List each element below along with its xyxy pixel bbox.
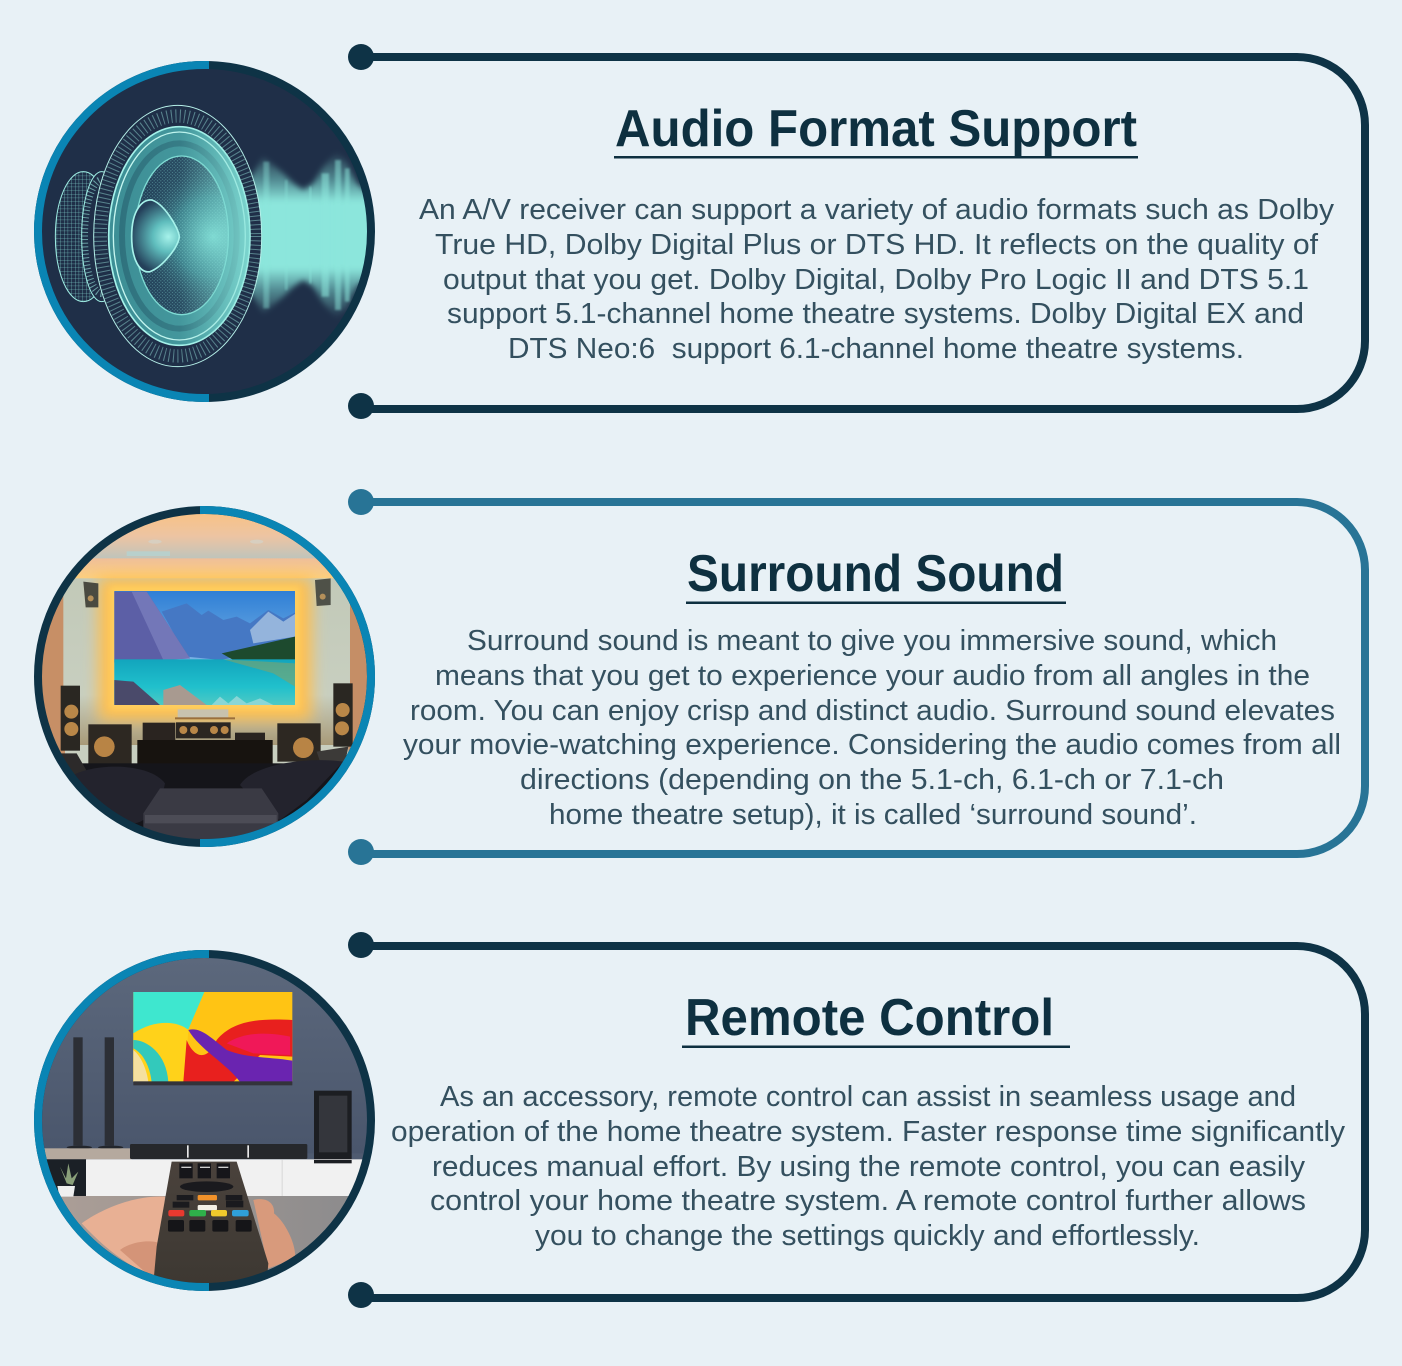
body text: [419, 194, 1335, 365]
panel: Remote Control: [33, 932, 1365, 1308]
image: home theatre room: [33, 507, 380, 850]
body text: directions (depending on the 5.1-ch, 6.1-ch or 7.1-ch: [520, 764, 1224, 796]
body text: room. You can enjoy crisp and distinct audio. Surround sound elevates: [410, 695, 1335, 727]
body text: reduces manual effort. By using the remote control, you can easily: [432, 1151, 1306, 1183]
body text: [391, 1081, 1346, 1252]
heading: Audio Format Support: [615, 100, 1137, 158]
image: hand holding remote facing TV: [33, 947, 380, 1293]
body text: means that you get to experience your audio from all angles in the: [435, 660, 1310, 692]
frame: rounded connector with dots: [348, 44, 1365, 419]
body text: [403, 625, 1341, 831]
body text: DTS Neo:6 support 6.1-channel home theatre systems.: [508, 333, 1244, 365]
frame: rounded connector with dots: [348, 489, 1365, 865]
body text: operation of the home theatre system. Faster response time significantly: [391, 1116, 1346, 1148]
body text: control your home theatre system. A remote control further allows: [430, 1185, 1306, 1217]
heading: Surround Sound: [687, 545, 1064, 603]
frame: rounded connector with dots: [348, 932, 1365, 1308]
body text: True HD, Dolby Digital Plus or DTS HD. It reflects on the quality of: [435, 229, 1319, 261]
body text: Surround sound is meant to give you immersive sound, which: [467, 625, 1277, 657]
panel: Surround Sound: [33, 489, 1365, 865]
body text: you to change the settings quickly and effortlessly.: [535, 1220, 1200, 1252]
body text: support 5.1-channel home theatre systems. Dolby Digital EX and: [447, 298, 1304, 330]
body text: output that you get. Dolby Digital, Dolby Pro Logic II and DTS 5.1: [443, 264, 1309, 296]
image: speaker with sound wave: [38, 65, 373, 398]
body text: your movie-watching experience. Considering the audio comes from all: [403, 729, 1341, 761]
body text: As an accessory, remote control can assist in seamless usage and: [440, 1081, 1296, 1113]
body text: home theatre setup), it is called ‘surround sound’.: [549, 799, 1197, 831]
panel: Audio Format Support: [38, 44, 1365, 419]
body text: An A/V receiver can support a variety of audio formats such as Dolby: [419, 194, 1335, 226]
heading: Remote Control: [685, 989, 1054, 1047]
